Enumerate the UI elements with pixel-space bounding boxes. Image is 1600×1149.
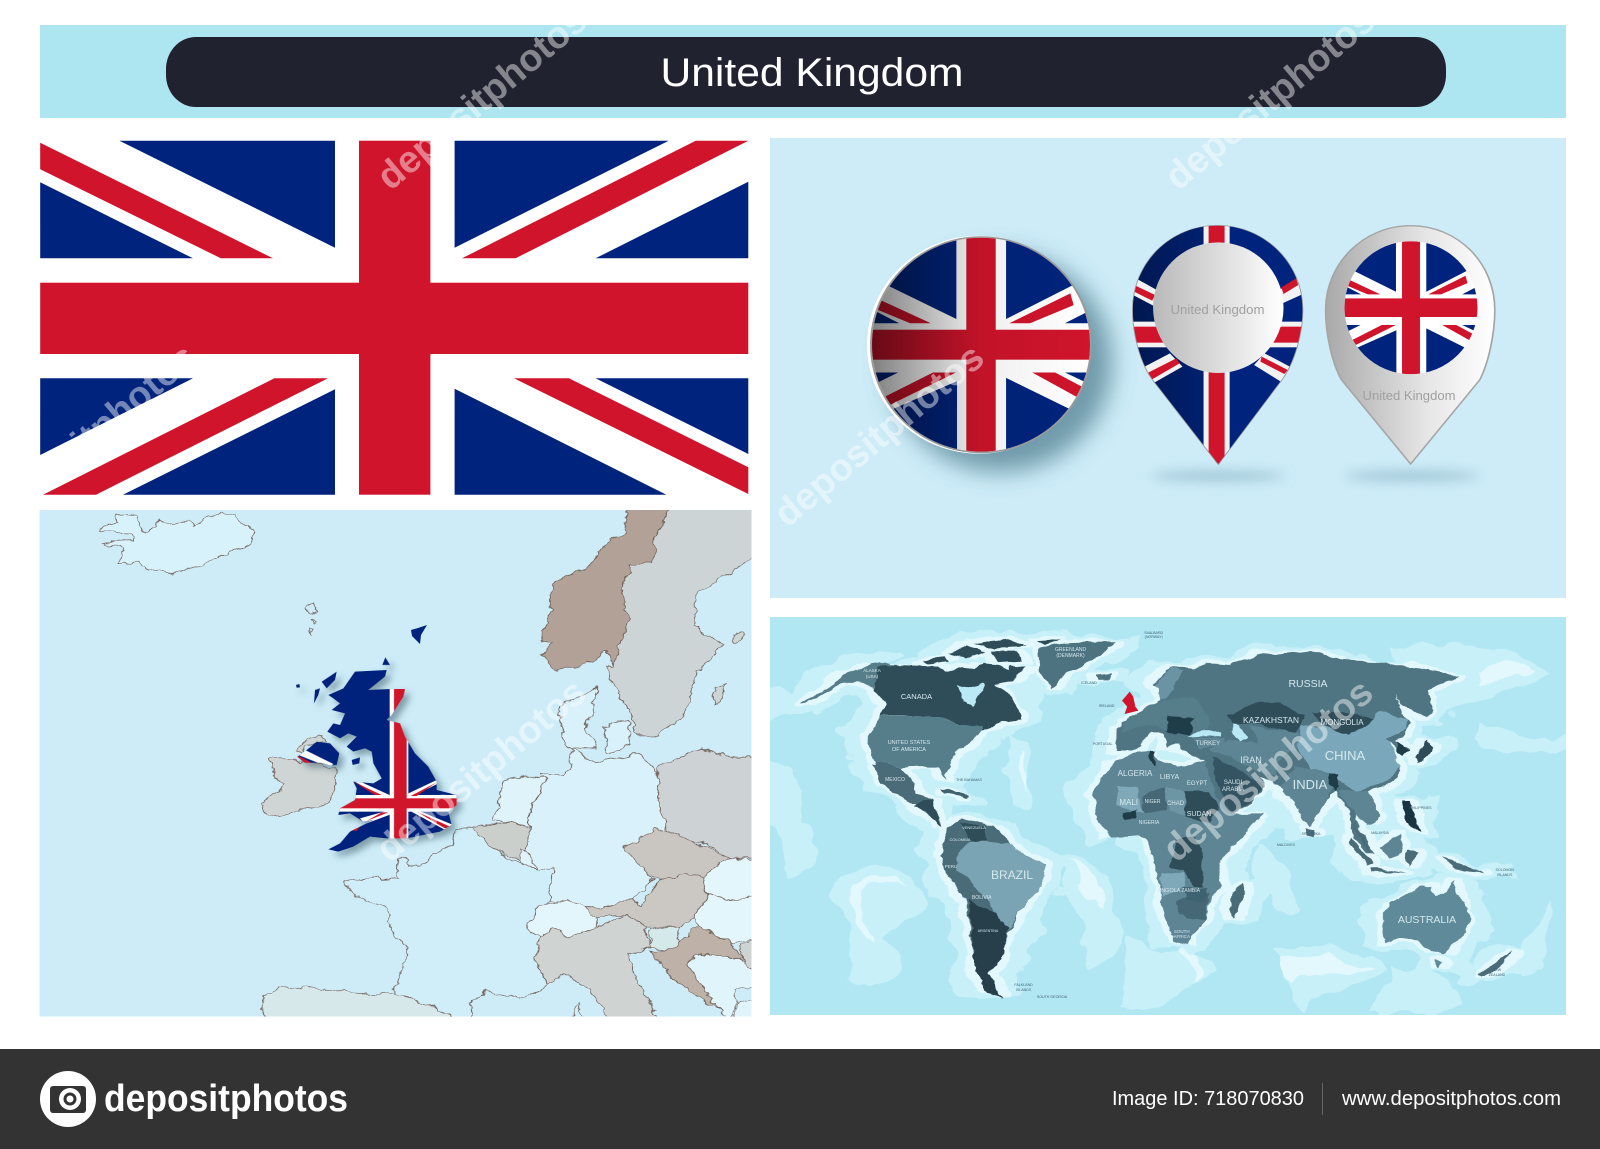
small territory labels: NEW (1493, 968, 1502, 972)
Germany (521, 748, 668, 906)
small territory labels: SOLOMON (1496, 868, 1514, 872)
country labels: IRAN (1240, 755, 1262, 765)
small territory labels: THE BAHAMAS (956, 778, 982, 782)
country labels: BRAZIL (991, 868, 1033, 882)
Slovakia (704, 857, 752, 900)
ocean currents (760, 645, 1571, 1013)
country labels: ARABIA (1222, 787, 1244, 793)
pin label: United Kingdom (1170, 302, 1264, 317)
European countries (99, 500, 771, 1027)
small territory labels: MALDIVES (1277, 843, 1296, 847)
pin disc (1153, 242, 1284, 373)
Serbia (739, 940, 752, 970)
country labels: LIBYA (1160, 774, 1179, 781)
Netherlands (494, 777, 545, 827)
small territory labels: FALKLAND (1014, 983, 1033, 987)
round flag badge (867, 227, 1092, 462)
small territory labels: IRELAND (1099, 704, 1115, 708)
website: www.depositphotos.com (1341, 1088, 1561, 1110)
Corsica (565, 1001, 582, 1027)
Switzerland (526, 900, 597, 937)
small territory labels: ZEALAND (1489, 973, 1506, 977)
country labels: ALASKA (863, 668, 881, 673)
Bosnia (687, 954, 752, 1016)
country labels: AUSTRALIA (1398, 914, 1456, 926)
country labels: SUDAN (1187, 811, 1211, 818)
small territory labels: PORTUGAL (1093, 742, 1113, 746)
Australia and New Zealand (1382, 880, 1512, 977)
title band (40, 25, 1566, 118)
country labels: MEXICO (885, 777, 905, 783)
country labels: AFRICA (1173, 934, 1190, 939)
country labels: MALI (1119, 798, 1138, 807)
Sweden and Finland (607, 500, 771, 736)
country labels: NIGERIA (1139, 820, 1160, 826)
Poland (656, 748, 752, 859)
logo wordmark: depositphotos (104, 1078, 348, 1120)
depositphotos watermarks: depositphotos (369, 0, 595, 198)
country labels: EGYPT (1187, 781, 1208, 787)
country labels: (USA) (866, 674, 879, 679)
country labels: CHINA (1325, 748, 1366, 763)
small territory labels: SVALBARD (1144, 631, 1164, 635)
depositphotos watermarks: depositphotos (766, 336, 992, 535)
Great Britain (323, 667, 460, 853)
Northern Ireland top (295, 736, 324, 755)
country labels: CHAD (1167, 801, 1185, 807)
Northern Ireland (293, 738, 342, 768)
Baltic islands (713, 633, 743, 705)
United Kingdom flag map (293, 657, 460, 853)
panel: world map (760, 617, 1571, 1015)
country labels: RUSSIA (1288, 678, 1328, 690)
Slovenia (648, 927, 680, 951)
small territory labels: SRI LANKA (1302, 832, 1321, 836)
country labels: SAUDI (1224, 780, 1242, 786)
Croatia (648, 927, 744, 1010)
country labels: UNITED STATES (888, 740, 931, 746)
country labels: CANADA (901, 692, 932, 701)
country labels: BOLIVIA (972, 895, 992, 901)
Eurasia (1117, 650, 1461, 853)
South America (941, 818, 1046, 998)
Orkney and Hebrides (296, 657, 390, 765)
Hungary (694, 893, 752, 944)
title: United Kingdom (660, 51, 964, 95)
depositphotos watermarks: depositphotos (1155, 671, 1381, 870)
Faroe Islands (304, 602, 317, 635)
small territory labels: PHILIPPINES (1409, 806, 1432, 810)
country labels: SOUTH (1174, 929, 1190, 934)
Norway (540, 500, 678, 669)
country labels (863, 647, 1456, 939)
Italy (534, 914, 657, 1016)
flag pin with centre disc (1128, 223, 1309, 467)
Austria (582, 874, 707, 927)
small territory labels: ICELAND (1081, 681, 1097, 685)
Denmark (560, 688, 631, 753)
country labels: COLOMBIA (949, 837, 971, 842)
Shetland (411, 625, 427, 644)
country labels: GREENLAND (1055, 647, 1086, 653)
badge shadow (888, 252, 1112, 472)
Ireland (261, 758, 336, 818)
icon: camera logo (40, 1071, 96, 1127)
country labels: (DENMARK) (1056, 653, 1085, 659)
country labels: MONGOLIA (1320, 718, 1364, 727)
Africa (1094, 750, 1262, 943)
small territory labels: ISLANDS (1497, 873, 1513, 877)
pin shadows (1150, 471, 1480, 481)
Asia Pacific islands (1349, 800, 1484, 873)
title pill (166, 37, 1446, 107)
country labels: VENEZUELA (962, 825, 986, 830)
Luxembourg (521, 848, 535, 869)
country labels: PERU (945, 864, 957, 869)
image id: Image ID: 718070830 (1112, 1088, 1304, 1110)
country labels: OF AMERICA (892, 747, 926, 753)
country labels: ANGOLA (1158, 888, 1181, 894)
North America (801, 639, 1117, 827)
Montenegro (734, 992, 771, 1027)
small territory labels: MALAYSIA (1371, 831, 1389, 835)
Spain (263, 986, 469, 1027)
large union flag (40, 141, 748, 495)
depositphotos watermarks: depositphotos (368, 671, 594, 870)
depositphotos watermarks (0, 0, 1383, 870)
country labels: INDIA (1293, 777, 1328, 792)
white pin with round flag (1326, 226, 1495, 464)
France (346, 827, 555, 1027)
Czechia (624, 829, 732, 881)
country labels: ALGERIA (1118, 769, 1153, 778)
panel: Europe map (40, 500, 771, 1027)
country labels: ZAMBIA (1181, 888, 1201, 894)
panel: pins and badge (770, 138, 1566, 598)
country labels: ARGENTINA (978, 929, 999, 933)
Iceland (99, 512, 255, 573)
continents (801, 639, 1512, 998)
depositphotos watermarks: depositphotos (1157, 0, 1383, 198)
Belgium (472, 822, 528, 860)
small territory labels: ISLANDS (1016, 988, 1032, 992)
small territory labels (956, 631, 1514, 999)
footer bar (0, 1049, 1600, 1149)
country labels: NIGER (1145, 799, 1161, 805)
United Kingdom highlight (1122, 692, 1138, 714)
pin label: United Kingdom (1362, 388, 1456, 403)
small territory labels: SOUTH GEORGIA (1037, 995, 1068, 999)
small territory labels: (NORWAY) (1145, 635, 1163, 639)
country labels: TURKEY (1196, 741, 1220, 747)
country labels: KAZAKHSTAN (1243, 715, 1299, 725)
